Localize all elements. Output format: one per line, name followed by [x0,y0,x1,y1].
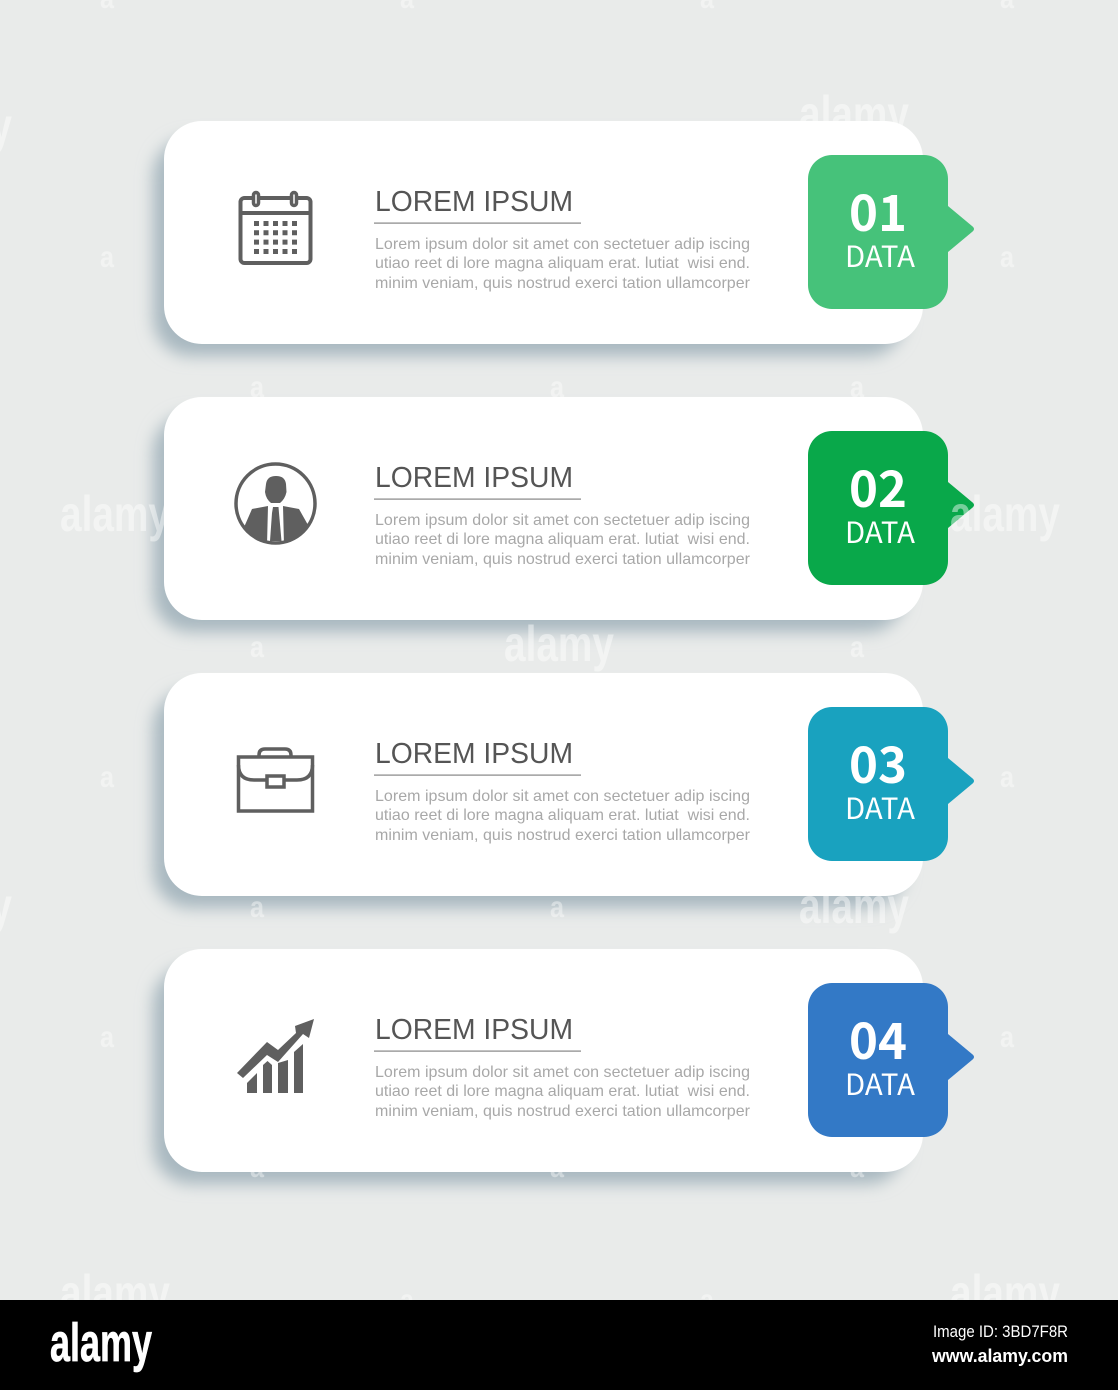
watermarks: a [850,631,864,664]
heading: step 3: LOREM IPSUM [375,738,573,770]
watermarks: a [550,1151,564,1184]
watermarks: a [250,631,264,664]
text block: step 2: minim veniam, quis nostrud exerci tation ullamcorper [375,551,751,568]
text block: step 2 [375,512,751,568]
watermarks: a [700,1284,714,1317]
text block: step 3: Lorem ipsum dolor sit amet con sectetuer adip iscing [375,788,750,805]
badge: 03 data: 03 [849,726,907,798]
text block: step 4 [375,1064,751,1120]
icon: growth chart [237,1019,314,1093]
text block: step 4: minim veniam, quis nostrud exerci tation ullamcorper [375,1103,751,1120]
text block: step 1: utiao reet di lore magna aliquam erat. lutiat wisi end. [375,255,750,272]
watermarks: a [1000,241,1014,274]
text block: step 3: utiao reet di lore magna aliquam erat. lutiat wisi end. [375,807,750,824]
badge: 01 data [808,155,974,309]
watermarks: alamy [799,86,909,142]
badge: 02 data: 02 [849,450,907,522]
badge: 01 data: 01 [849,174,907,246]
footer bar [0,1300,1118,1390]
watermarks: a [850,371,864,404]
panel: step 3 [153,673,974,908]
watermarks: a [1000,761,1014,794]
text block: step 1: minim veniam, quis nostrud exerci tation ullamcorper [375,275,751,292]
watermarks: alamy [60,486,170,542]
watermarks: a [100,241,114,274]
text block: step 4: Lorem ipsum dolor sit amet con sectetuer adip iscing [375,1064,750,1081]
watermarks: a [400,1284,414,1317]
watermarks: a [850,1151,864,1184]
panel: step 2 [153,397,974,632]
heading: step 2: LOREM IPSUM [375,462,573,494]
watermarks: alamy [950,1265,1060,1321]
text block: step 1: Lorem ipsum dolor sit amet con sectetuer adip iscing [375,236,750,253]
watermarks: a [250,371,264,404]
footer logo: alamy [50,1313,152,1373]
badge: 01 data: DATA [845,234,915,276]
watermarks: a [1000,1021,1014,1054]
panel: step 1 [153,121,974,356]
badge: 04 data [808,983,974,1137]
text block: step 4: utiao reet di lore magna aliquam erat. lutiat wisi end. [375,1083,750,1100]
text block: step 3 [375,788,751,844]
heading: step 1: LOREM IPSUM [375,186,573,218]
badge: 03 data: DATA [845,786,915,828]
watermarks: a [100,1021,114,1054]
image id: Image ID: 3BD7F8R [933,1322,1068,1341]
badge: 04 data: DATA [845,1062,915,1104]
badge: 02 data [808,431,974,585]
heading: step 4: LOREM IPSUM [375,1014,573,1046]
panel: step 4 [153,949,974,1184]
icon: businessman [236,464,315,545]
icon: briefcase [238,749,312,811]
website: www.alamy.com [931,1346,1068,1366]
badge: 02 data: DATA [845,510,915,552]
text block: step 2: Lorem ipsum dolor sit amet con sectetuer adip iscing [375,512,750,529]
watermarks: alamy [60,1265,170,1321]
badge: 04 data: 04 [849,1002,907,1074]
icon: calendar [240,192,311,263]
watermarks: a [250,1151,264,1184]
text block: step 1 [375,236,751,292]
text block: step 2: utiao reet di lore magna aliquam erat. lutiat wisi end. [375,531,750,548]
watermarks: alamy [799,878,909,934]
watermarks: alamy [950,486,1060,542]
watermarks: a [550,371,564,404]
watermarks: a [100,761,114,794]
watermarks: a [250,891,264,924]
text block: step 3: minim veniam, quis nostrud exerci tation ullamcorper [375,827,751,844]
watermarks: alamy [504,616,614,672]
badge: 03 data [808,707,974,861]
watermarks: a [550,891,564,924]
